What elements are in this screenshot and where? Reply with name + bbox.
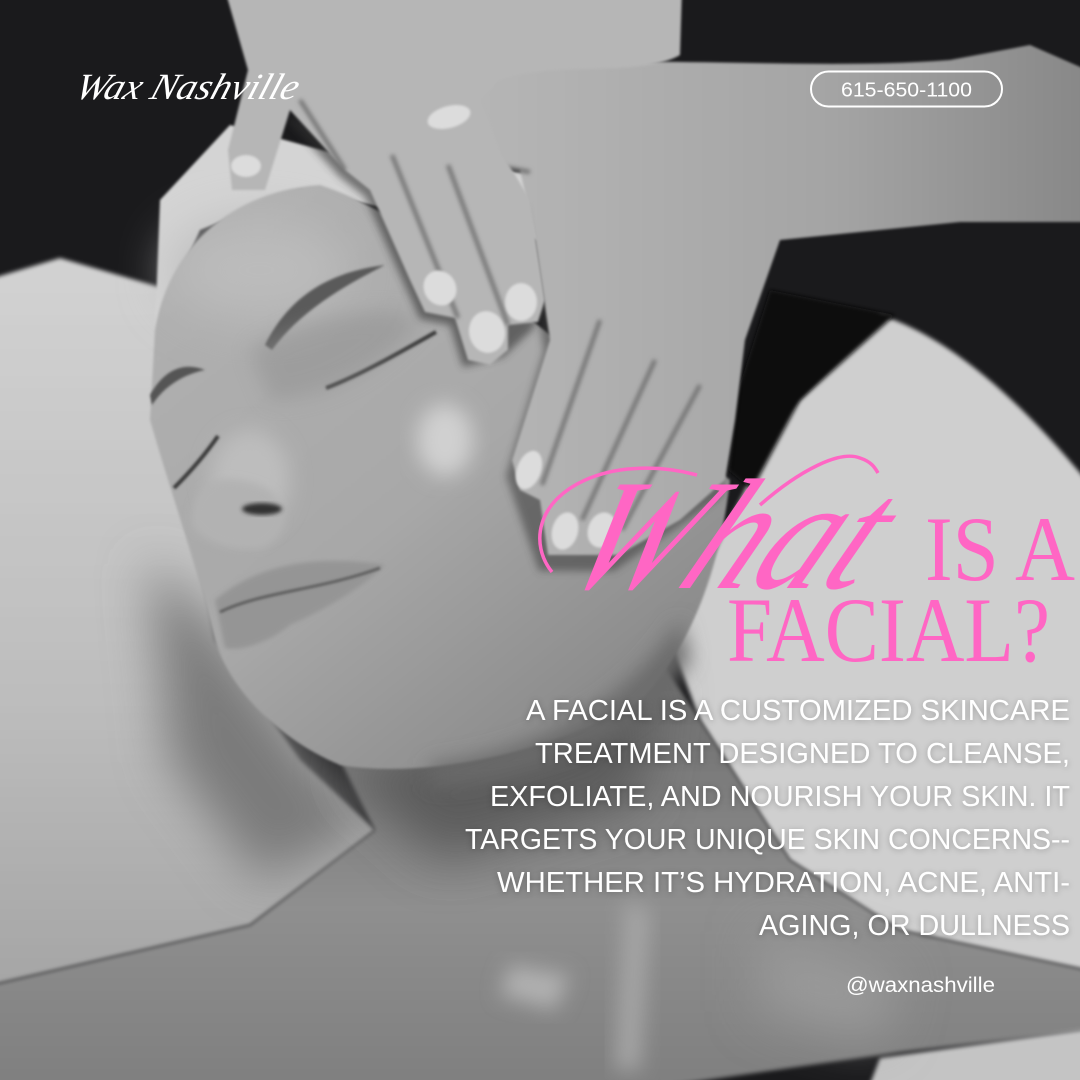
eye right bbox=[326, 332, 436, 388]
nose bbox=[192, 479, 284, 549]
towel under head, left bbox=[0, 258, 375, 990]
decorative flourishes of the script title bbox=[540, 456, 878, 572]
jaw shadow bbox=[430, 620, 690, 785]
body paragraph: TARGETS YOUR UNIQUE SKIN CONCERNS-- bbox=[465, 824, 1070, 856]
lip line bbox=[220, 568, 380, 612]
nostril bbox=[242, 503, 282, 515]
brand logo: Wax Nashville: Wax Nashville bbox=[70, 67, 305, 108]
body paragraph: A FACIAL IS A CUSTOMIZED SKINCARE bbox=[526, 695, 1070, 727]
body paragraph: EXFOLIATE, AND NOURISH YOUR SKIN. IT bbox=[490, 781, 1070, 813]
eyebrow right bbox=[265, 265, 385, 350]
phone number pill: 615-650-1100 bbox=[841, 80, 972, 102]
top hand shadow bbox=[285, 117, 540, 367]
shadow beside the face bbox=[150, 560, 372, 880]
body paragraph: WHETHER IT’S HYDRATION, ACNE, ANTI- bbox=[497, 867, 1070, 899]
nose highlight bbox=[210, 430, 290, 530]
body paragraph: TREATMENT DESIGNED TO CLEANSE, bbox=[535, 738, 1070, 770]
lower hand and forearm bbox=[425, 45, 1080, 555]
body paragraph bbox=[465, 695, 1070, 942]
top hand bbox=[225, 0, 682, 365]
towel behind shoulder, right bbox=[670, 315, 1080, 975]
title script word: What bbox=[537, 448, 933, 623]
forehead tone bbox=[170, 220, 350, 320]
lower hand finger creases bbox=[440, 155, 700, 530]
nails bbox=[231, 101, 621, 553]
phone number pill bbox=[811, 72, 1002, 106]
eyebrow left bbox=[150, 367, 205, 405]
lower hand and forearm shadow bbox=[506, 256, 739, 571]
top hand finger creases bbox=[300, 100, 508, 325]
light strip at bottom edge bbox=[860, 1026, 1080, 1080]
headband bbox=[155, 125, 548, 330]
eye socket shading bbox=[250, 312, 420, 400]
title: What is a facial? bbox=[537, 448, 1075, 681]
eye left bbox=[174, 436, 218, 488]
face bbox=[150, 185, 730, 769]
dark hair bbox=[728, 290, 895, 490]
social handle: @waxnashville bbox=[846, 974, 995, 997]
neck and chest bbox=[0, 660, 1080, 1080]
cheek highlight bbox=[417, 404, 473, 476]
body paragraph: AGING, OR DULLNESS bbox=[759, 910, 1070, 942]
neck highlights bbox=[615, 900, 650, 1070]
lips bbox=[215, 561, 385, 649]
